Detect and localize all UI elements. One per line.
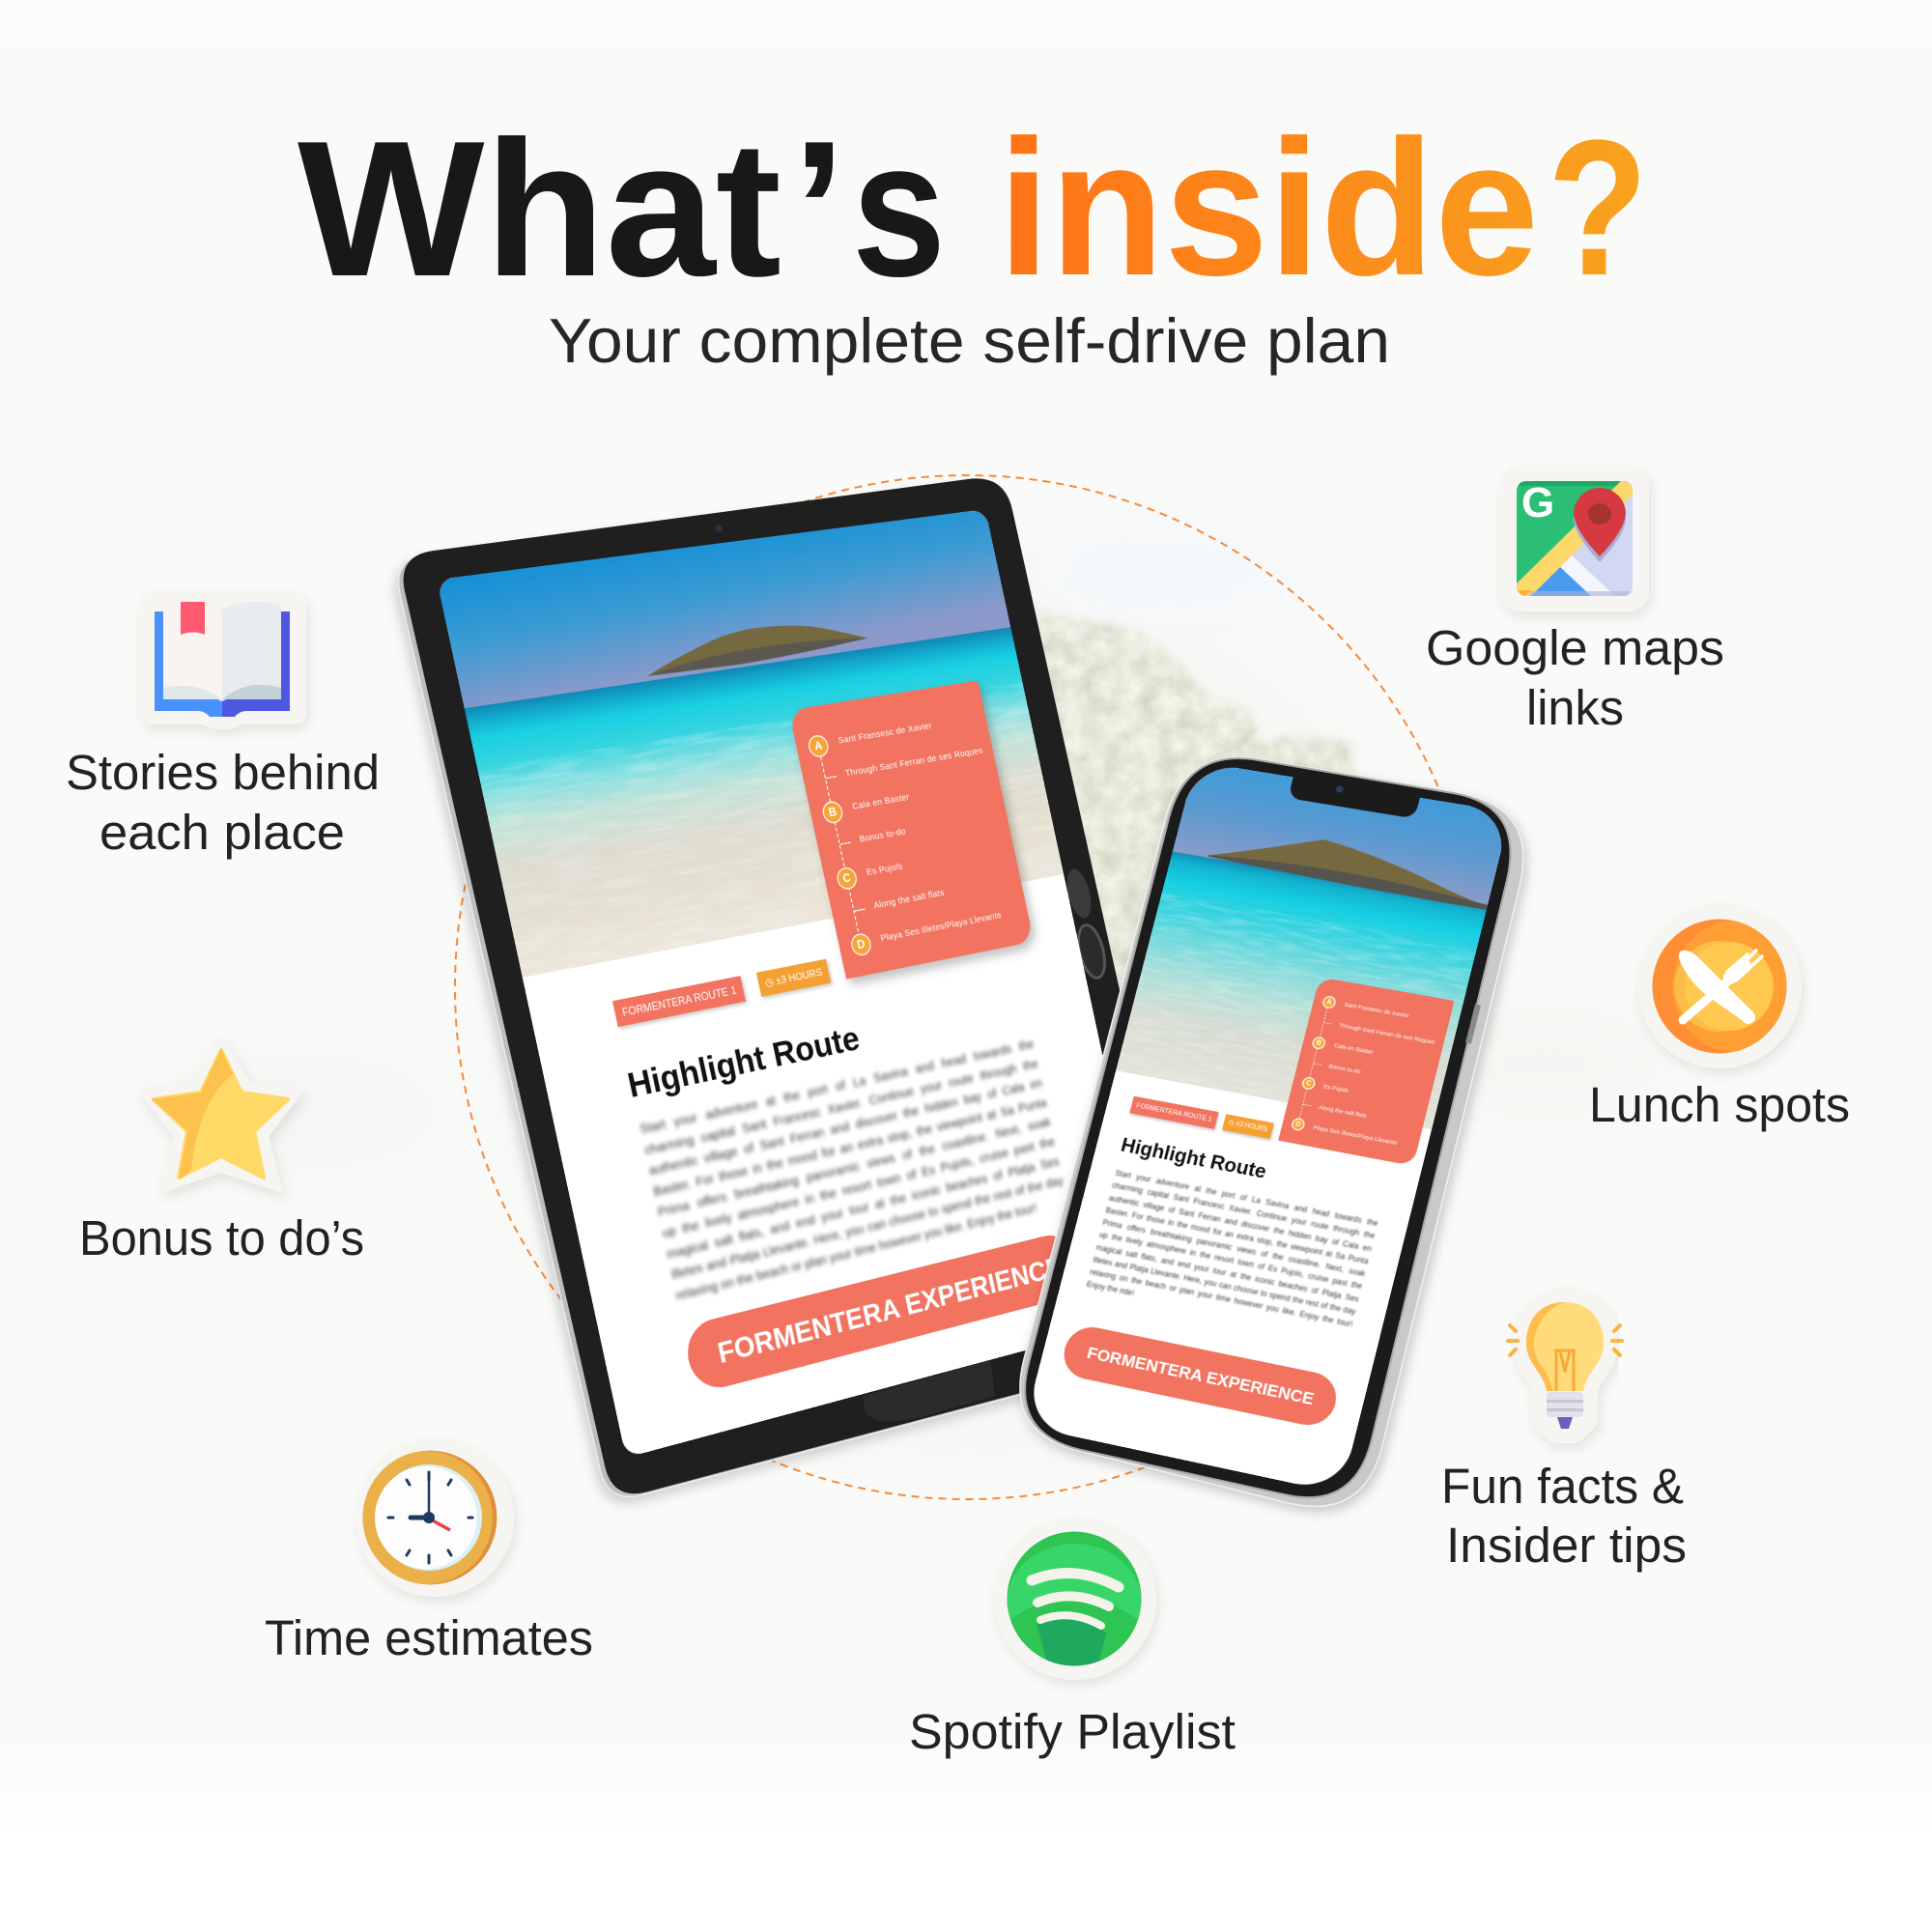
title: What — [298, 101, 781, 317]
label: fun facts: Fun facts & — [1441, 1459, 1684, 1514]
label: fun facts — [1441, 1459, 1687, 1573]
blurred body text: authentic village of Sant Ferran and discover the hidden bay of Cala en — [647, 1076, 1043, 1179]
route card: Along the salt flats — [1318, 1104, 1367, 1119]
blurred body text: relaxing on the beach or plan your time however you like. Enjoy the tour! — [674, 1201, 1038, 1303]
label: time: Time estimates — [265, 1610, 593, 1665]
label: maps: Google maps — [1426, 620, 1724, 675]
phone button: FORMENTERA EXPERIENCE — [1085, 1343, 1316, 1408]
phone button — [1059, 1322, 1342, 1430]
route card: D — [1294, 1121, 1301, 1128]
overlay: title, labels and icons — [68, 134, 1849, 1758]
blurred body text: Illetes and Platja Llevante. Here, you can choose to spend the rest of the day — [1092, 1255, 1357, 1316]
icon: clock — [355, 1438, 514, 1597]
icon: google maps: G — [1521, 479, 1554, 526]
subtitle: Your complete self-drive plan — [549, 305, 1390, 376]
hours tag — [1222, 1114, 1274, 1139]
title — [298, 100, 1648, 317]
icon: google maps — [1500, 466, 1649, 611]
icon: light bulb — [1508, 1302, 1622, 1429]
phone screen — [1024, 761, 1511, 1493]
route card: Sant Fransesc de Xavier — [1344, 1001, 1409, 1019]
tablet device — [390, 478, 1121, 1508]
dashed circle — [455, 475, 1479, 1499]
blurred body text: relaxing on the beach or plan your time however you like. Enjoy the tour! — [1089, 1267, 1353, 1328]
beach photo — [440, 510, 1064, 978]
route card: Playa Ses Illetes/Playa Llevante — [1313, 1124, 1398, 1146]
label: lunch: Lunch spots — [1589, 1077, 1850, 1132]
route card — [788, 681, 1034, 980]
label: maps — [1426, 620, 1724, 735]
route card: C — [841, 871, 852, 886]
route card: Playa Ses Illetes/Playa Llevante — [880, 910, 1003, 944]
route card: Through Sant Ferran de ses Roques — [1339, 1022, 1435, 1045]
label: stories: Stories behind — [66, 745, 380, 800]
hours tag — [756, 959, 831, 997]
route card: Bonus to-do — [1328, 1063, 1361, 1075]
title: inside — [998, 100, 1539, 316]
notch — [1288, 774, 1421, 819]
title: ’ — [792, 101, 846, 317]
blurred body text: Start your adventure at the port of La Savina and head towards the — [1115, 1169, 1378, 1228]
tablet heading: Highlight Route — [624, 1018, 863, 1105]
icon: star — [141, 1039, 301, 1190]
blurred body text: Baster. For those in the mood for an extra stop, the viewpoint at Sa Punta — [652, 1095, 1048, 1199]
blurred body text: Prima offers breathtaking panoramic views of the coastline. Next, soak — [657, 1115, 1052, 1220]
route card: Sant Fransesc de Xavier — [838, 721, 933, 746]
blurred body text: authentic village of Sant Ferran and discover the hidden bay of Cala en — [1108, 1193, 1373, 1253]
route card: A — [813, 739, 824, 753]
phone heading: Highlight Route — [1119, 1134, 1268, 1182]
route tag: FORMENTERA ROUTE 1 — [621, 983, 737, 1019]
route card: C — [1305, 1079, 1312, 1088]
label: fun facts: Insider tips — [1446, 1518, 1687, 1573]
route card: B — [828, 805, 838, 819]
route card — [1278, 977, 1455, 1166]
beach photo — [1116, 767, 1501, 1129]
route card: D — [856, 937, 867, 952]
blurred body text: Prima offers breathtaking panoramic views of the coastline. Next, soak — [1101, 1218, 1366, 1278]
tablet button — [681, 1230, 1085, 1394]
label: spotify: Spotify Playlist — [909, 1704, 1236, 1759]
hours tag: ◷ ±3 HOURS — [764, 966, 823, 989]
label: stories: each place — [99, 805, 345, 860]
route card: Cala en Baster — [1333, 1042, 1374, 1055]
route card: A — [1325, 998, 1332, 1007]
route card: Es Pujols — [1323, 1083, 1349, 1094]
route card: Along the salt flats — [872, 888, 945, 911]
title: ? — [1548, 100, 1648, 316]
faded tree backdrop — [126, 502, 1671, 1478]
blurred body text: charming capital Sant Francesc Xavier. Continue your route through the — [1111, 1180, 1376, 1240]
icon: spotify — [994, 1518, 1156, 1685]
route tag: FORMENTERA ROUTE 1 — [1135, 1102, 1213, 1123]
blurred body text: charming capital Sant Francesc Xavier. Continue your route through the — [643, 1057, 1039, 1157]
title: s — [852, 101, 946, 317]
route card: Es Pujols — [866, 861, 903, 878]
route card: B — [1316, 1038, 1322, 1047]
route card: Bonus to-do — [859, 826, 907, 844]
blurred body text: up the lively atmosphere in the resort town of Es Pujols, cruise past the — [661, 1135, 1056, 1240]
route tag — [612, 976, 746, 1027]
tablet screen — [437, 509, 1158, 1458]
label: stories — [66, 745, 380, 860]
blurred body text: Enjoy the ride! — [1086, 1280, 1135, 1297]
route card: Cala en Baster — [851, 792, 910, 811]
blurred body text: Baster. For those in the mood for an extra stop, the viewpoint at Sa Punta — [1105, 1206, 1370, 1265]
phone device — [1016, 755, 1532, 1517]
label: maps: links — [1526, 680, 1624, 735]
blurred body text: magical salt flats, and end your tour at the iconic beaches of Platja Ses — [666, 1154, 1061, 1262]
blurred body text — [638, 1037, 1065, 1303]
route card: Through Sant Ferran de ses Roques — [844, 746, 983, 779]
blurred body text: Start your adventure at the port of La Savina and head towards the — [639, 1037, 1036, 1137]
label: bonus: Bonus to do’s — [79, 1210, 364, 1265]
route tag — [1129, 1096, 1219, 1129]
blurred body text: Illetes and Platja Llevante. Here, you can choose to spend the rest of the day — [670, 1174, 1065, 1282]
blurred body text — [1086, 1169, 1379, 1328]
icon: open book — [140, 591, 306, 729]
hours tag: ◷ ±3 HOURS — [1228, 1120, 1268, 1133]
blurred body text: up the lively atmosphere in the resort town of Es Pujols, cruise past the — [1098, 1230, 1363, 1291]
icon: lunch — [1637, 904, 1805, 1068]
blurred body text: magical salt flats, and end your tour at the iconic beaches of Platja Ses — [1095, 1242, 1360, 1303]
tablet button: FORMENTERA EXPERIENCE — [715, 1250, 1065, 1370]
